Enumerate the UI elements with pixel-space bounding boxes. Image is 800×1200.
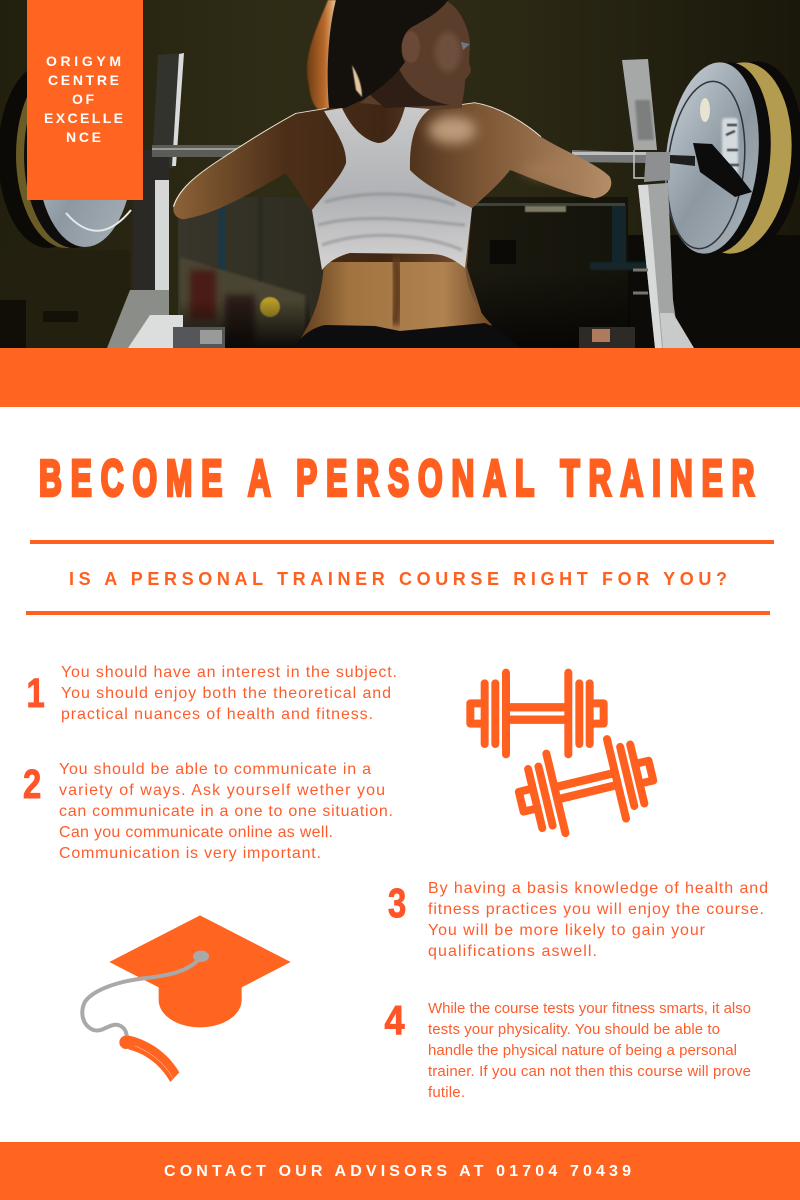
point 2 text: Can you communicate online as well. xyxy=(59,824,333,841)
point 1 text xyxy=(61,664,397,723)
point 1: 1 xyxy=(26,669,45,716)
lower back xyxy=(300,262,492,340)
logo text: NCE xyxy=(66,129,101,145)
tassel xyxy=(119,1035,179,1082)
point 3 text: By having a basis knowledge of health and xyxy=(428,880,768,897)
woman's back and arms xyxy=(173,100,611,348)
point 2 text: Communication is very important. xyxy=(59,845,321,862)
dumbbell lower xyxy=(512,731,660,841)
icon: dumbbells xyxy=(470,673,660,841)
point 4: 4 xyxy=(384,998,405,1044)
point 3 text xyxy=(428,880,768,960)
logo box xyxy=(27,0,143,200)
point 1 text: You should enjoy both the theoretical and xyxy=(61,685,391,702)
left barbell plate xyxy=(0,62,133,248)
right barbell plate xyxy=(656,56,800,260)
title: BECOME A PERSONAL TRAINER xyxy=(39,450,754,506)
point 3 text: fitness practices you will enjoy the course. xyxy=(428,901,764,918)
point 1 text: practical nuances of health and fitness. xyxy=(61,706,373,723)
top fabric folds xyxy=(318,194,465,250)
ponytail xyxy=(307,0,336,109)
barbell xyxy=(152,145,648,163)
head and neck xyxy=(360,0,471,110)
tassel cord xyxy=(82,957,201,1037)
point 3 text: You will be more likely to gain your xyxy=(428,922,706,939)
logo text xyxy=(44,53,123,145)
point 2 text: can communicate in a one to one situation. xyxy=(59,803,393,820)
point 2 text xyxy=(59,761,393,862)
footer band xyxy=(0,1142,800,1200)
cap xyxy=(109,915,291,1027)
waistband xyxy=(293,323,520,348)
point 4 text: trainer. If you can not then this course will prove xyxy=(428,1063,751,1080)
left rack post xyxy=(107,53,225,348)
logo text: ORIGYM xyxy=(46,53,121,69)
right rack post xyxy=(579,59,694,348)
logo text: EXCELLE xyxy=(44,110,123,126)
point 4 text: handle the physical nature of being a personal xyxy=(428,1042,737,1059)
point 2 text: You should be able to communicate in a xyxy=(59,761,371,778)
point 3 xyxy=(388,879,768,960)
point 2 text: variety of ways. Ask yourself wether you xyxy=(59,782,385,799)
gym background xyxy=(0,197,800,348)
subtitle: IS A PERSONAL TRAINER COURSE RIGHT FOR YOU? xyxy=(69,569,727,589)
dumbbell upper xyxy=(470,673,604,754)
logo text: CENTRE xyxy=(48,72,119,88)
logo text: OF xyxy=(72,91,94,107)
sports top xyxy=(312,107,472,270)
point 4 text: tests your physicality. You should be able to xyxy=(428,1021,720,1038)
point 2: 2 xyxy=(23,760,41,807)
point 2 xyxy=(23,760,393,862)
point 1 xyxy=(26,664,397,723)
point 4 text: While the course tests your fitness smarts, it also xyxy=(428,1000,751,1017)
point 3: 3 xyxy=(388,879,406,926)
icon: graduation cap xyxy=(82,915,291,1082)
point 1 text: You should have an interest in the subject. xyxy=(61,664,397,681)
hair xyxy=(328,0,448,108)
point 4 xyxy=(384,998,751,1101)
hero photo: woman lifting barbell xyxy=(0,0,800,348)
orange band xyxy=(0,348,800,407)
point 4 text xyxy=(428,1000,751,1101)
point 3 text: qualifications aswell. xyxy=(428,943,597,960)
point 4 text: futile. xyxy=(428,1084,465,1101)
contact text: CONTACT OUR ADVISORS AT 01704 70439 xyxy=(164,1163,631,1180)
